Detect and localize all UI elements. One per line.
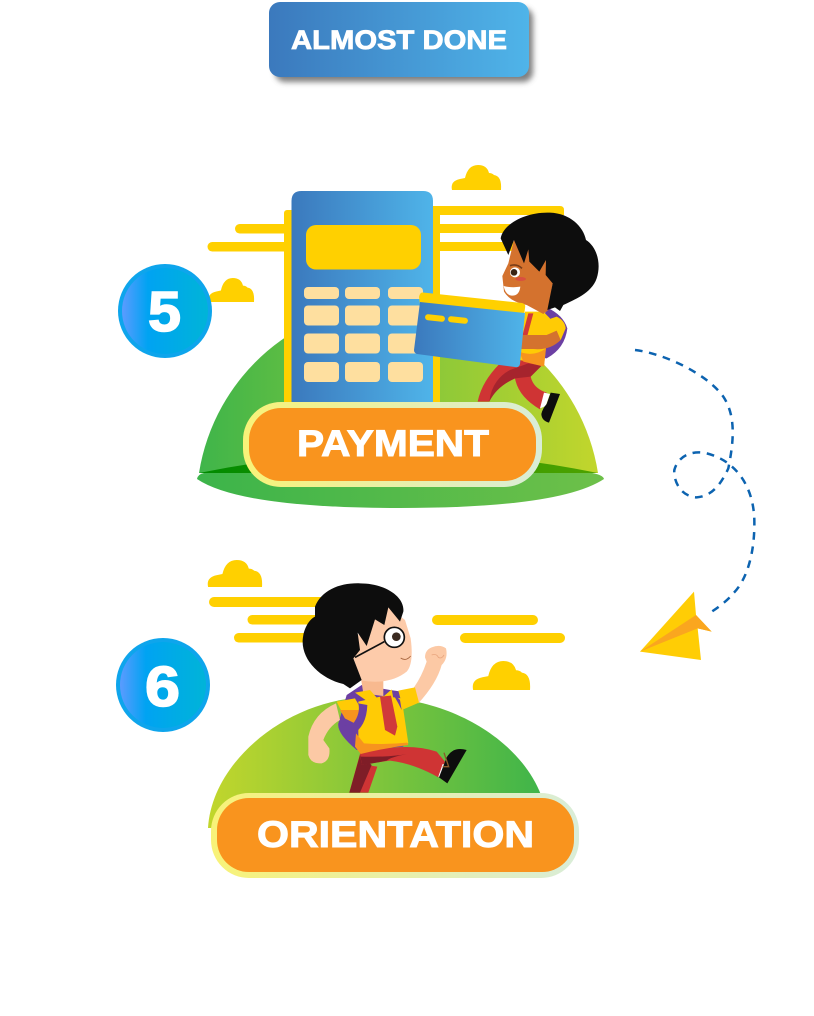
speed lines and clouds behind calculator xyxy=(208,165,564,405)
payment card xyxy=(414,292,525,367)
speed lines and clouds xyxy=(208,560,565,690)
panel: step 5 payment xyxy=(118,165,604,508)
panel: step 6 orientation xyxy=(116,560,579,878)
number badge 6: 6 xyxy=(145,655,180,719)
number badge 6 xyxy=(116,638,210,732)
character: student carrying a card xyxy=(478,213,599,423)
icon: paper plane xyxy=(640,592,712,660)
label: orientation: ORIENTATION xyxy=(257,814,534,855)
label: payment xyxy=(243,402,542,487)
number badge 5: 5 xyxy=(148,280,181,344)
green hill xyxy=(208,697,541,830)
title banner: almost done: ALMOST DONE xyxy=(291,25,507,55)
label: orientation xyxy=(211,793,579,878)
number badge 5 xyxy=(118,264,212,358)
title banner: almost done xyxy=(269,2,533,82)
green hill with base xyxy=(197,303,604,508)
label: payment: PAYMENT xyxy=(297,423,489,464)
calculator xyxy=(292,191,433,405)
dashed flight path with paper plane xyxy=(635,350,754,660)
character: student with glasses running xyxy=(303,583,467,793)
